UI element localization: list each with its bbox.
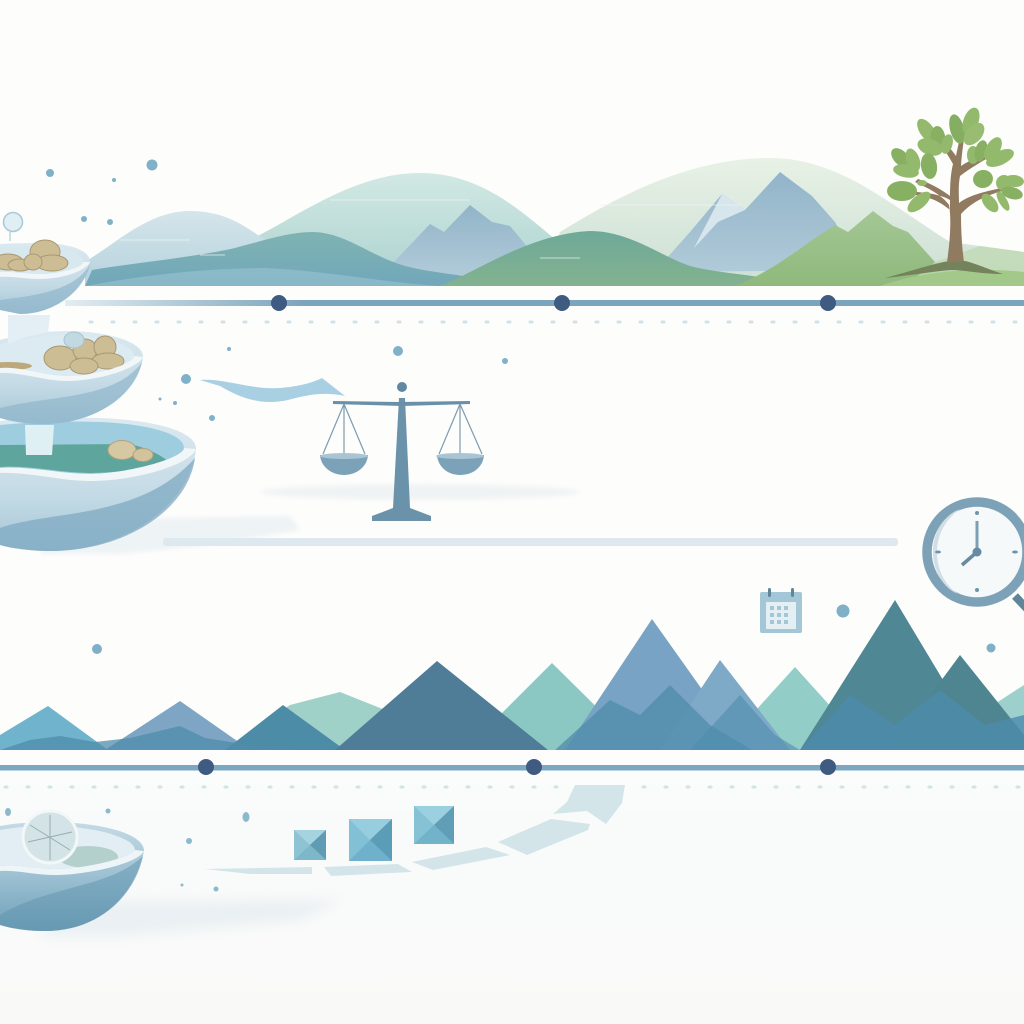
leaves <box>887 105 1024 216</box>
lens <box>927 502 1024 602</box>
dotted row <box>5 786 1024 788</box>
milestone dots <box>271 295 287 311</box>
trunk and branches <box>900 125 1002 262</box>
body shade <box>0 856 143 931</box>
particles near fountain <box>46 160 508 421</box>
body shade <box>0 458 195 551</box>
milestone dots <box>198 759 214 775</box>
top landscape <box>85 158 1024 286</box>
teal back peaks <box>225 692 440 750</box>
shadow under fountain <box>40 516 300 554</box>
lower mountain range <box>0 600 1024 750</box>
clock hands <box>962 521 982 565</box>
beam <box>333 401 470 406</box>
mountain: right range <box>658 172 860 272</box>
dotted row <box>90 320 1024 324</box>
hill: lower wash <box>85 268 440 286</box>
rim <box>0 448 196 481</box>
pillar <box>372 398 431 521</box>
coin icon <box>4 212 22 232</box>
timeline bar <box>0 765 1024 770</box>
mountain: left range <box>388 205 545 275</box>
bottom bowl shadow <box>40 900 340 936</box>
small coin pile <box>0 362 32 370</box>
rim <box>0 262 90 279</box>
blue peaks <box>0 706 108 750</box>
top knob <box>397 382 407 392</box>
green slope <box>905 246 1024 286</box>
coin stack <box>44 332 124 374</box>
bowl 1 (top) <box>0 212 90 314</box>
timeline 2 <box>0 759 1024 787</box>
horizontal bar <box>163 538 898 546</box>
body shade <box>0 264 90 314</box>
arrow: curved segmented <box>205 785 625 876</box>
large coin <box>23 811 77 863</box>
low front hills <box>0 726 300 750</box>
water <box>0 444 168 473</box>
icon: balance scale <box>260 382 580 521</box>
block 3 <box>414 806 454 844</box>
waterfall <box>8 315 50 344</box>
timeline 1 <box>65 295 1024 322</box>
bowl 3 (bottom) <box>0 417 196 551</box>
snow highlights <box>694 194 745 248</box>
rim <box>0 850 144 875</box>
highlights <box>120 200 740 258</box>
scale shadow <box>260 484 580 500</box>
icons: pyramid blocks <box>294 806 454 861</box>
green mountains <box>735 211 1024 286</box>
particles middle <box>92 604 996 654</box>
hill: left blue green <box>85 232 520 286</box>
rim <box>0 356 143 381</box>
coin pile <box>58 846 118 868</box>
icon: calendar <box>760 588 802 633</box>
hill: pale green <box>540 158 1024 286</box>
left pan <box>320 404 368 475</box>
timeline bar <box>65 300 1024 306</box>
hill: centre teal green <box>440 231 800 286</box>
icon: tree <box>885 105 1024 278</box>
icon: clock magnifier <box>927 502 1024 614</box>
hill: pale teal <box>250 173 600 286</box>
bowl 4 with coin <box>0 811 144 931</box>
block 2 <box>349 819 392 861</box>
ribbon banner <box>200 378 345 402</box>
handle <box>1015 596 1024 614</box>
fountain of bowls <box>0 212 196 551</box>
clock ticks <box>935 511 1018 592</box>
ground mound <box>885 261 1003 278</box>
ground <box>880 270 1024 286</box>
body shade <box>0 362 142 424</box>
coins <box>0 240 68 271</box>
particles lower <box>5 808 250 892</box>
block 1 <box>294 830 326 860</box>
coins in water <box>108 440 153 462</box>
hill: pale blue <box>85 211 300 286</box>
right pan <box>436 404 484 475</box>
bowl 2 (middle) <box>0 315 143 424</box>
lens shadow <box>933 509 960 594</box>
waterfall <box>25 425 54 455</box>
